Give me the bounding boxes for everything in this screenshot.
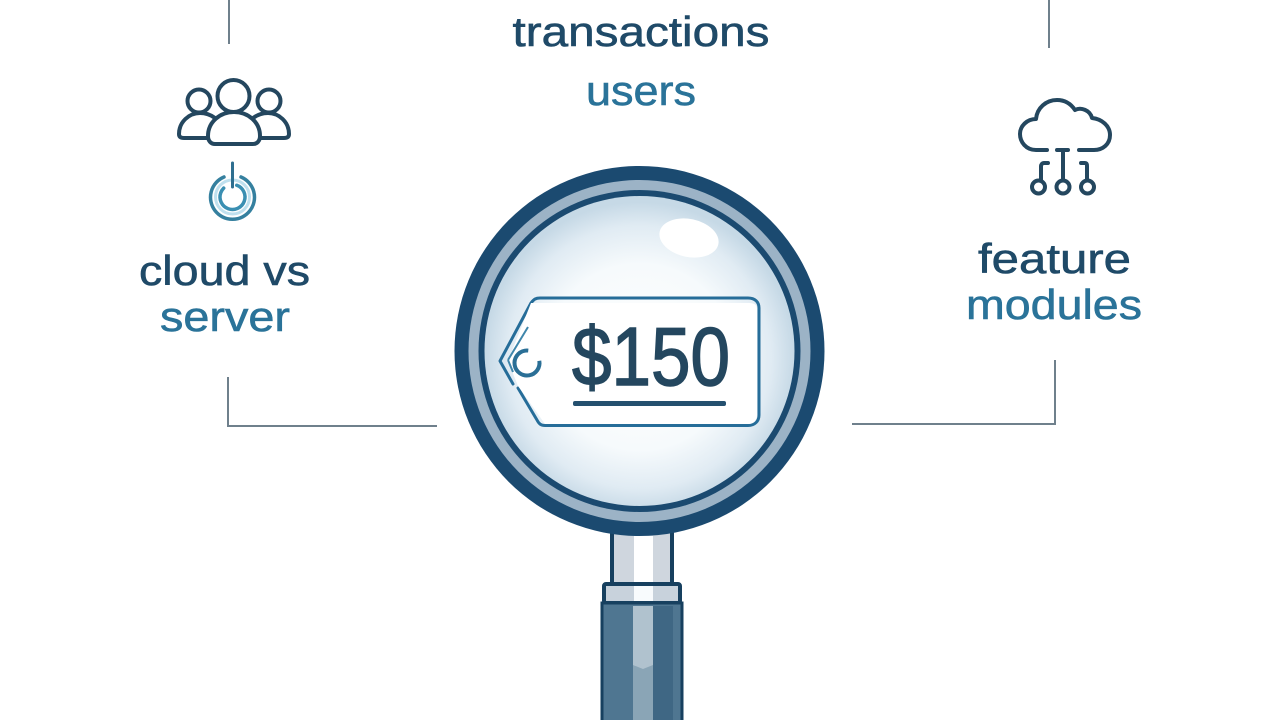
label: transactions: transactions	[512, 8, 770, 55]
label: cloud vs server: server	[160, 293, 290, 340]
icon: cloud modules	[1020, 100, 1110, 194]
label: feature modules: modules	[966, 281, 1142, 328]
label: feature modules: feature	[978, 235, 1131, 282]
tag hole	[513, 349, 541, 377]
magnifying glass	[454, 166, 824, 720]
price tag	[500, 298, 759, 426]
label: cloud vs server: cloud vs	[139, 247, 310, 294]
handle neck	[612, 530, 672, 584]
connector: top left	[228, 0, 230, 44]
icon: power target	[211, 163, 254, 219]
connector: top right	[1048, 0, 1050, 48]
label: feature modules	[966, 235, 1142, 328]
handle grip	[602, 603, 682, 720]
label: users: users	[586, 67, 696, 114]
connector: bottom left	[228, 377, 437, 426]
label: cloud vs server	[139, 247, 310, 340]
lens highlight	[656, 213, 722, 263]
icon: users group	[179, 80, 289, 144]
handle collar	[604, 584, 680, 603]
price: $150	[572, 310, 730, 403]
price underline	[573, 401, 726, 406]
connector: bottom right	[852, 360, 1055, 424]
lens frame	[454, 166, 824, 536]
